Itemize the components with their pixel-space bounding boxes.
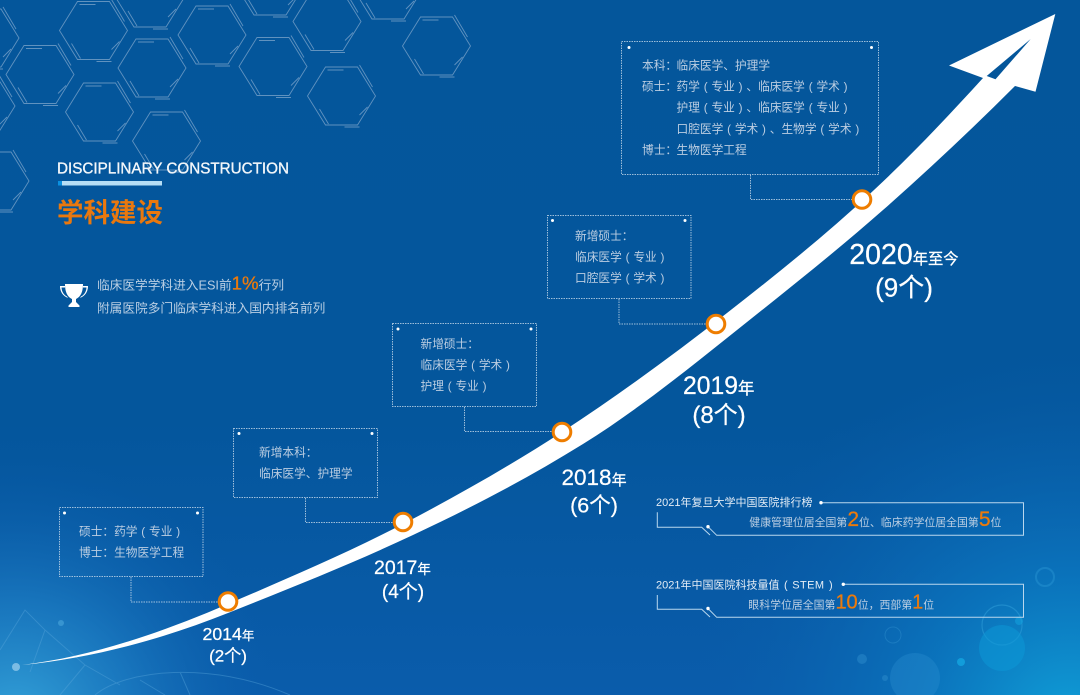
marker: 2014	[219, 593, 237, 610]
panel: 2020 callout: 博士：	[642, 143, 677, 157]
panel: 2020 callout: 生物医学工程	[676, 143, 747, 157]
label: 2019: 2019年	[683, 373, 754, 400]
panel: 2018 callout: 临床医学 ( 学术 )	[420, 358, 510, 372]
panel: Fudan ranking: 2021年复旦大学中国医院排行榜	[656, 495, 812, 509]
panel: 2020 callout: 硕士：	[642, 80, 677, 94]
panel: 2020 callout: 药学 ( 专业 ) 、临床医学 ( 学术 )	[676, 80, 848, 94]
label: 2017: 2017年	[374, 557, 431, 579]
panel: 2014 callout: 硕士：药学 ( 专业 )	[79, 524, 180, 538]
text: hospital ranking: 附属医院多门临床学科进入国内排名前列	[97, 300, 325, 316]
panel: 2014 callout	[60, 508, 218, 602]
panel: 2020 callout: 本科：	[642, 58, 677, 72]
arrowhead inner notch	[987, 39, 1031, 79]
label: 2014: (2个)	[209, 646, 247, 666]
panel: 2020 callout: 临床医学、护理学	[676, 58, 770, 72]
label: 2018: 2018年	[562, 465, 627, 490]
panel: 2020 callout: 口腔医学 ( 学术 ) 、生物学 ( 学术 )	[676, 122, 859, 136]
label: 2020: (9个)	[875, 272, 933, 302]
marker: 2020	[853, 191, 871, 208]
label: 2018: (6个)	[570, 494, 618, 518]
marker: 2018	[553, 423, 571, 441]
panel: 2019 callout: 新增硕士：	[575, 229, 633, 243]
panel: STEM ranking: 2021年中国医院科技量值 ( STEM )	[656, 577, 833, 591]
panel: 2020 callout: 护理 ( 专业 ) 、临床医学 ( 专业 )	[676, 100, 848, 114]
panel: 2019 callout: 临床医学 ( 专业 )	[575, 250, 665, 264]
panel: Fudan ranking: 健康管理位居全国第2位、临床药学位居全国第5位	[749, 508, 1002, 531]
label: 2014: 2014年	[202, 624, 254, 644]
label: 2017: (4个)	[382, 581, 424, 603]
label: 2019	[683, 373, 754, 429]
heading: English title: DISCIPLINARY CONSTRUCTION	[57, 160, 289, 178]
panel: 2018 callout	[392, 324, 552, 432]
panel: 2020 callout	[622, 42, 878, 200]
label: 2018	[562, 465, 627, 518]
panel: Fudan ranking	[656, 495, 1024, 535]
panel: STEM ranking: 眼科学位居全国第10位，西部第1位	[748, 591, 934, 613]
panel: 2018 callout: 护理 ( 专业 )	[420, 379, 487, 393]
panel: 2019 callout: 口腔医学 ( 学术 )	[575, 271, 665, 285]
label: 2017	[374, 557, 431, 603]
panel: 2017 callout: 新增本科：	[259, 446, 317, 460]
marker: 2019	[707, 315, 725, 333]
panel: 2019 callout	[548, 216, 706, 324]
hexagon pattern	[0, 0, 470, 212]
panel: 2014 callout: 博士：生物医学工程	[79, 546, 185, 560]
panel: STEM ranking	[656, 577, 1024, 617]
icon: trophy	[60, 284, 88, 307]
heading: Chinese title: 学科建设	[57, 198, 163, 228]
label: 2020: 2020年至今	[849, 239, 959, 271]
label: 2014	[202, 624, 254, 666]
panel: 2017 callout: 临床医学、护理学	[259, 466, 353, 480]
marker: 2017	[394, 513, 412, 531]
title underline	[58, 181, 162, 186]
label: 2020	[849, 239, 959, 302]
panel: 2017 callout	[234, 428, 393, 522]
label: 2019: (8个)	[692, 402, 746, 429]
panel: 2018 callout: 新增硕士：	[420, 337, 479, 351]
text: ESI ranking: 临床医学学科进入ESI前1%行列	[97, 272, 284, 294]
